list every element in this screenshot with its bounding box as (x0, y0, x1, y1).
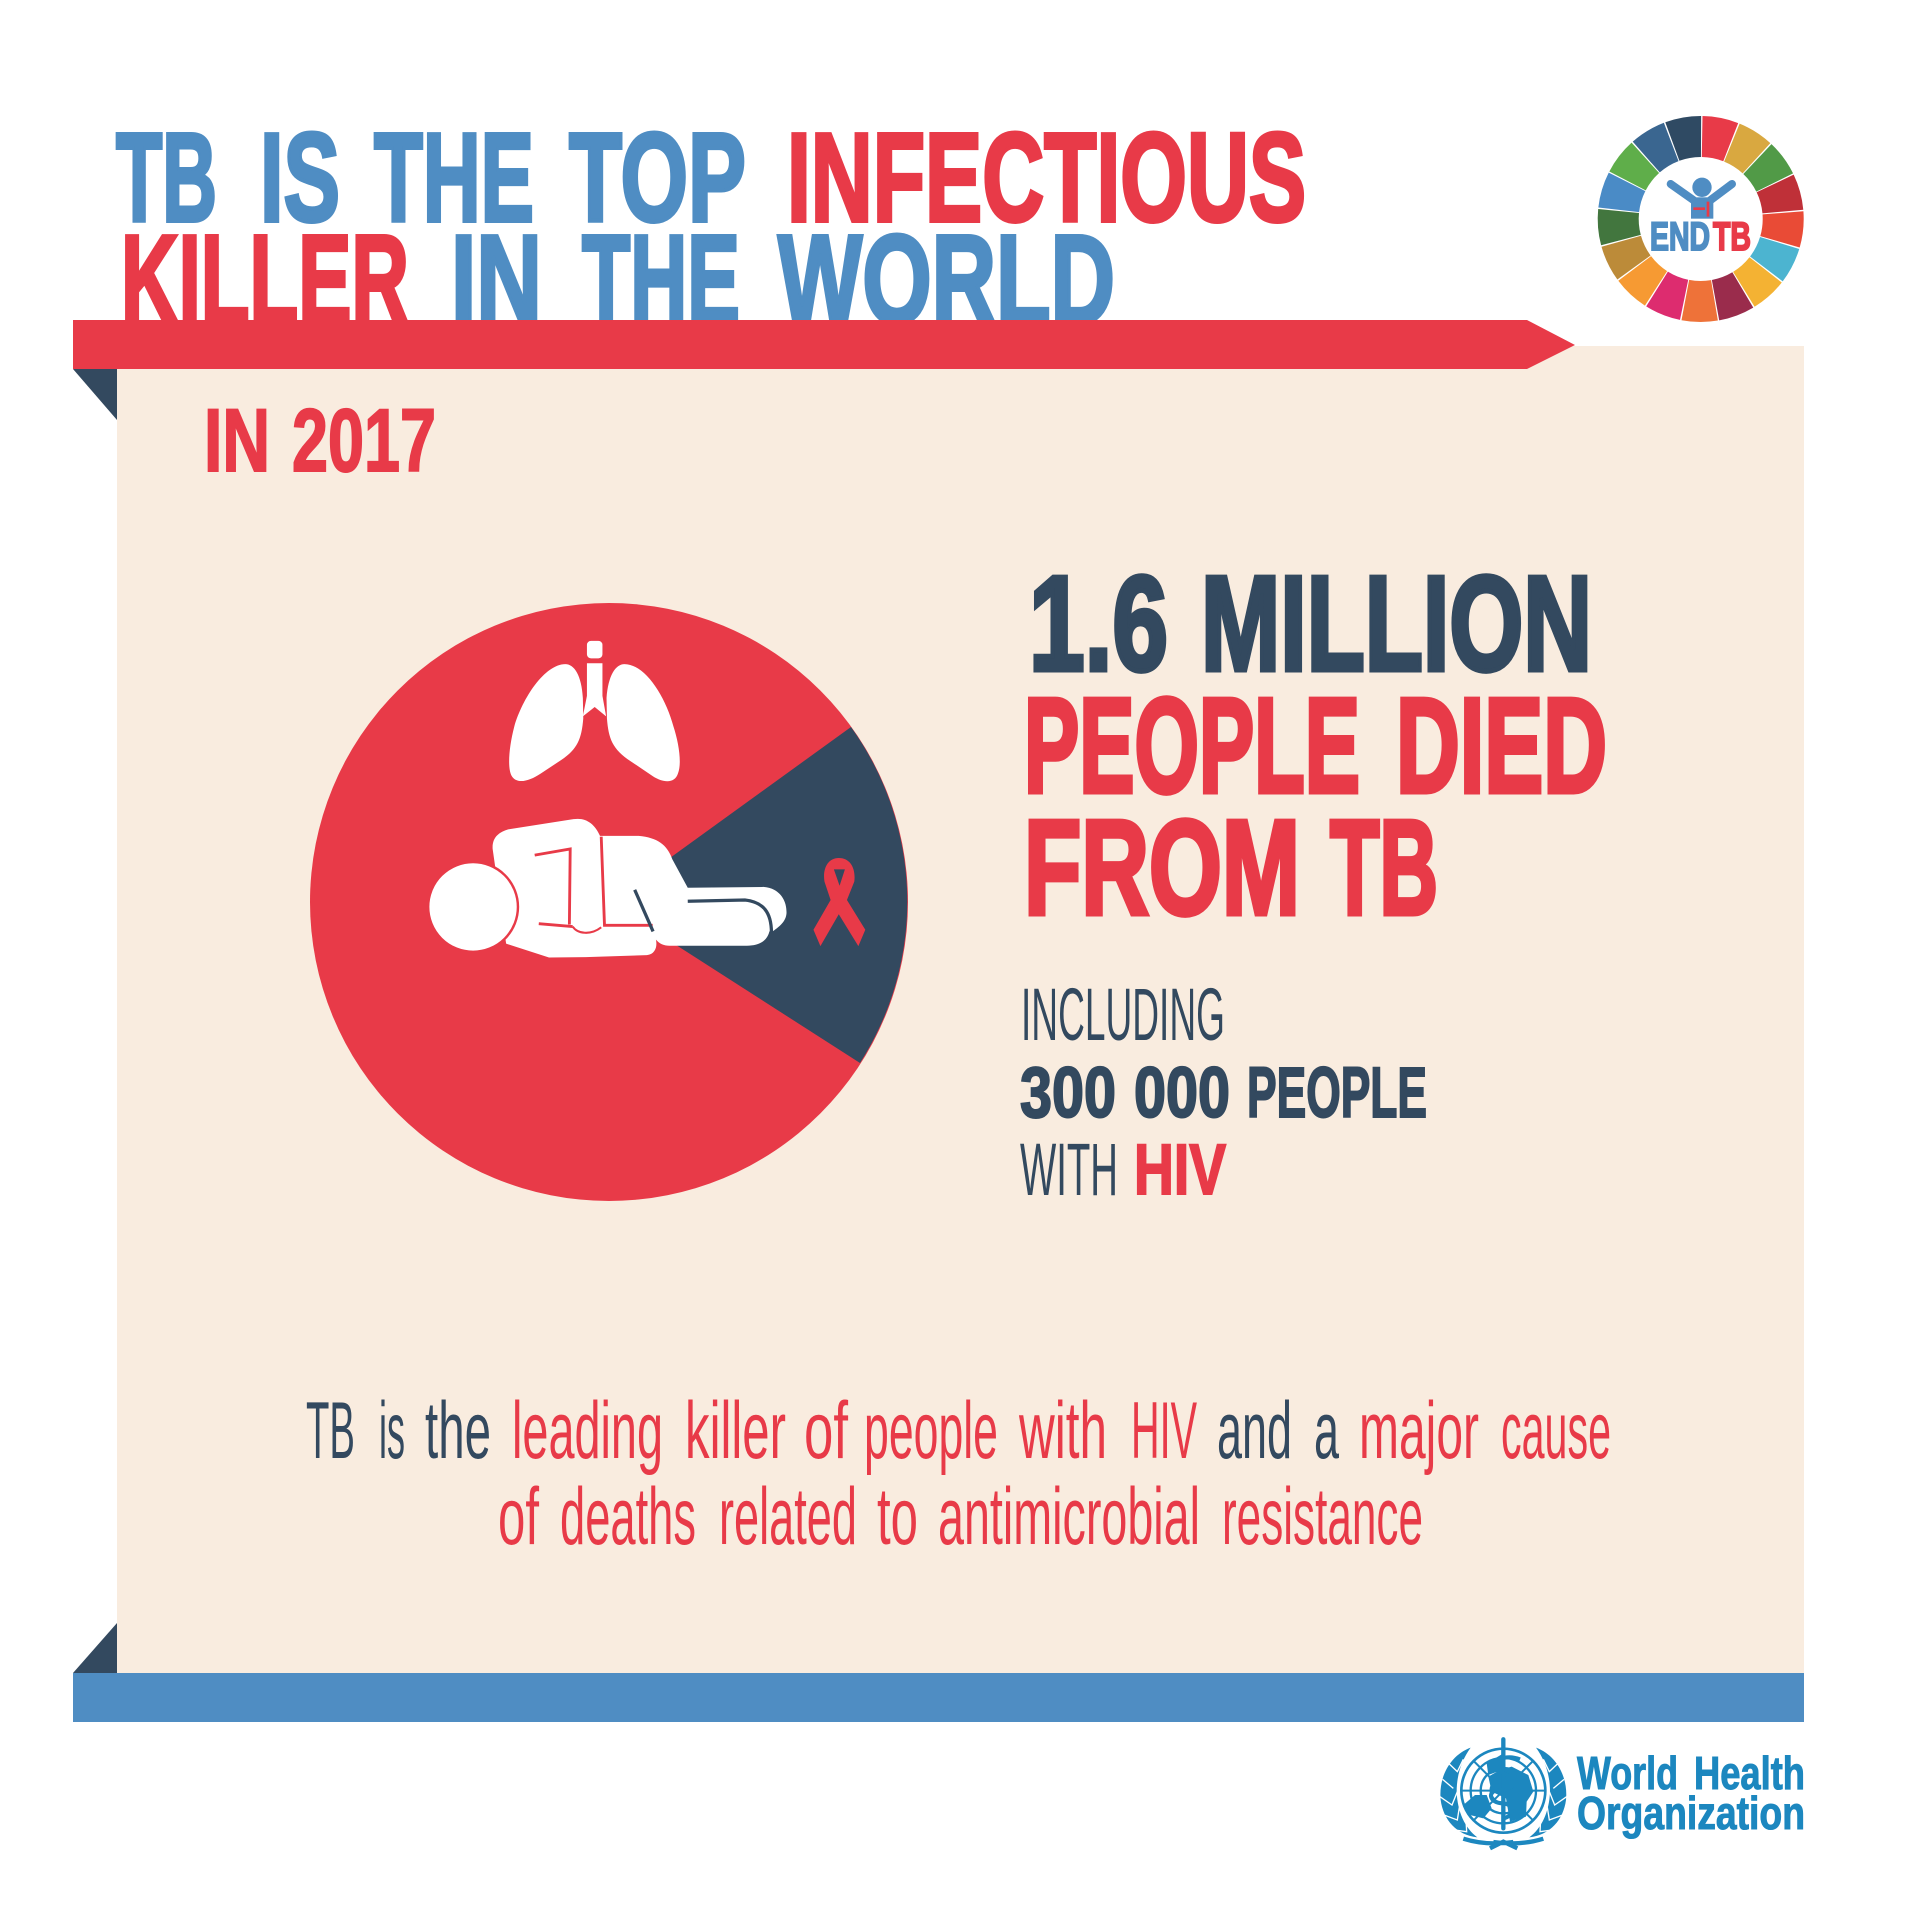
title: IN (451, 208, 542, 350)
pie slice: all TB deaths (310, 603, 908, 1201)
wreath ties (1463, 1839, 1543, 1848)
closing statement: leading (512, 1386, 663, 1476)
icon: lungs (509, 641, 680, 781)
closing statement: antimicrobial (938, 1472, 1200, 1562)
WHO emblem (1440, 1739, 1567, 1848)
headline statistic: 1.6 (1029, 548, 1168, 699)
title: IS (260, 106, 340, 248)
closing statement: a (1314, 1386, 1340, 1476)
staff and serpent (1491, 1739, 1520, 1828)
closing statement: people (864, 1386, 998, 1476)
headline statistic: PEOPLE (1024, 670, 1360, 821)
closing statement: cause (1501, 1386, 1611, 1476)
icon: person with raised arms (1671, 178, 1732, 219)
logo: World Health Organization (1440, 1739, 1805, 1848)
pie slice: TB deaths with HIV (609, 727, 907, 1063)
HIV statistic: HIV (1134, 1131, 1226, 1210)
closing statement: to (877, 1472, 918, 1562)
closing statement: and (1217, 1386, 1292, 1476)
title: THE (582, 208, 740, 350)
closing statement: killer (685, 1386, 786, 1476)
headline statistic: DIED (1396, 670, 1607, 821)
HIV statistic: INCLUDING (1021, 973, 1225, 1056)
continents (1463, 1753, 1533, 1822)
logo wordmark: END (1650, 215, 1710, 259)
HIV statistic: WITH (1020, 1128, 1118, 1211)
closing statement: deaths (560, 1472, 696, 1562)
title: KILLER (121, 208, 409, 350)
icons in pie (428, 641, 865, 958)
year label: IN (204, 390, 270, 490)
WHO wordmark: Organization (1577, 1787, 1805, 1839)
headline statistic (1024, 548, 1607, 943)
icon: HIV ribbon (813, 858, 865, 946)
ring of coloured segments (1584, 102, 1817, 336)
red arrow banner (73, 320, 1575, 369)
HIV statistic: 300 (1020, 1054, 1116, 1133)
bottom fold triangle (73, 1623, 117, 1673)
HIV statistic: 000 (1134, 1054, 1230, 1133)
top fold triangle (73, 369, 117, 420)
logo: End TB ring (1584, 102, 1817, 336)
HIV statistic: PEOPLE (1247, 1054, 1427, 1133)
headline statistic: TB (1330, 792, 1438, 943)
WHO wordmark (1577, 1747, 1805, 1839)
closing statement: of (804, 1386, 848, 1476)
logo wordmark: TB (1713, 215, 1751, 259)
title (116, 106, 1306, 350)
panel: cream background (117, 346, 1804, 1673)
headline statistic: FROM (1024, 792, 1300, 943)
WHO wordmark: World (1577, 1747, 1678, 1799)
closing statement: major (1359, 1386, 1479, 1476)
title: THE (374, 106, 534, 248)
title: TOP (569, 106, 746, 248)
title: WORLD (778, 208, 1115, 350)
closing statement: is (379, 1386, 405, 1476)
laurel wreath right (1529, 1748, 1567, 1837)
globe rings (1461, 1749, 1545, 1833)
pie chart (310, 603, 908, 1201)
year label (204, 390, 436, 490)
icon: person lying down (428, 819, 787, 958)
HIV statistic (1020, 973, 1427, 1211)
year label: 2017 (292, 390, 436, 490)
closing statement: TB (306, 1386, 355, 1476)
blue bottom banner (73, 1673, 1804, 1722)
WHO wordmark: Health (1694, 1747, 1805, 1799)
laurel wreath left (1440, 1748, 1477, 1837)
closing statement: with (1018, 1386, 1107, 1476)
title: INFECTIOUS (787, 106, 1306, 248)
closing statement (306, 1386, 1611, 1562)
title: TB (116, 106, 217, 248)
closing statement: of (498, 1472, 539, 1562)
closing statement: HIV (1131, 1386, 1197, 1476)
closing statement: related (719, 1472, 857, 1562)
closing statement: the (425, 1386, 491, 1476)
headline statistic: MILLION (1201, 548, 1592, 699)
closing statement: resistance (1222, 1472, 1423, 1562)
